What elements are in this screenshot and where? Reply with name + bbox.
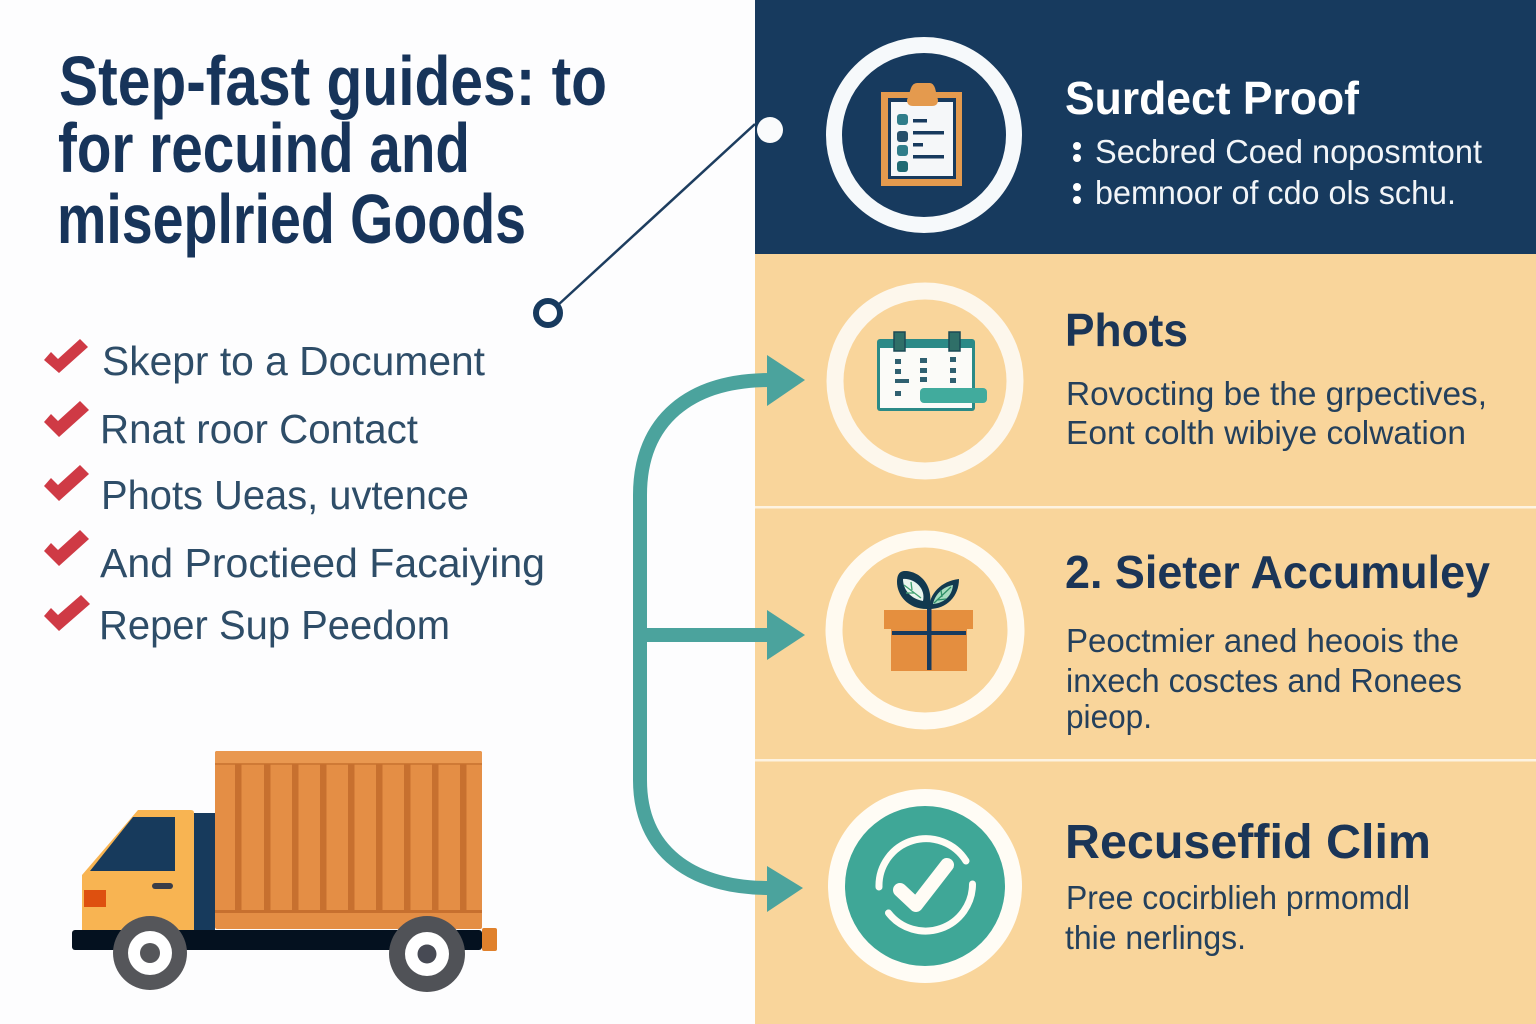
icon: calendar xyxy=(835,291,1015,471)
text: sieter accumuley: inxech cosctes and Ronees xyxy=(1066,662,1462,699)
text: recuseffid clim: Pree cocirblieh prmomdl xyxy=(1066,879,1410,916)
checklist xyxy=(44,338,545,648)
text: phots: Phots xyxy=(1065,304,1188,356)
text: sieter accumuley: Peoctmier aned heoois the xyxy=(1066,622,1459,659)
title: Step-fast guides: to xyxy=(59,42,607,120)
text: sieter accumuley: pieop. xyxy=(1066,698,1152,735)
connector line with end dots xyxy=(536,117,783,325)
text: surdect proof: bemnoor of cdo ols schu. xyxy=(1095,174,1456,211)
check item 5: Reper Sup Peedom xyxy=(99,602,450,648)
panel: navy proof xyxy=(755,0,1536,254)
check item 1: Skepr to a Document xyxy=(102,338,486,384)
title xyxy=(57,42,607,258)
title: for recuind and xyxy=(58,109,470,187)
check item 2: Rnat roor Contact xyxy=(100,406,419,452)
text: sieter accumuley: 2. Sieter Accumuley xyxy=(1065,546,1490,598)
check item 3: Phots Ueas, uvtence xyxy=(101,472,469,518)
text: surdect proof xyxy=(1065,72,1482,211)
icon: clipboard xyxy=(834,45,1014,225)
text: phots: Eont colth wibiye colwation xyxy=(1066,414,1466,451)
text: surdect proof: Secbred Coed noposmtont xyxy=(1095,133,1482,170)
text: sieter accumuley xyxy=(1065,546,1490,735)
text: recuseffid clim xyxy=(1065,816,1431,956)
title: miseplried Goods xyxy=(57,180,526,258)
icon: delivery truck xyxy=(72,751,497,992)
text: surdect proof: Surdect Proof xyxy=(1065,72,1360,124)
text: recuseffid clim: Recuseffid Clim xyxy=(1065,816,1431,869)
text: recuseffid clim: thie nerlings. xyxy=(1065,919,1246,956)
text: phots: Rovocting be the grpectives, xyxy=(1066,375,1487,412)
check item 4: And Proctieed Facaiying xyxy=(100,540,545,586)
icon: gift box with leaves xyxy=(834,539,1016,721)
panel: tan background xyxy=(755,254,1536,1024)
icon: teal check badge xyxy=(828,789,1022,983)
text: phots xyxy=(1065,304,1487,451)
arrows: branching flow xyxy=(640,355,805,912)
